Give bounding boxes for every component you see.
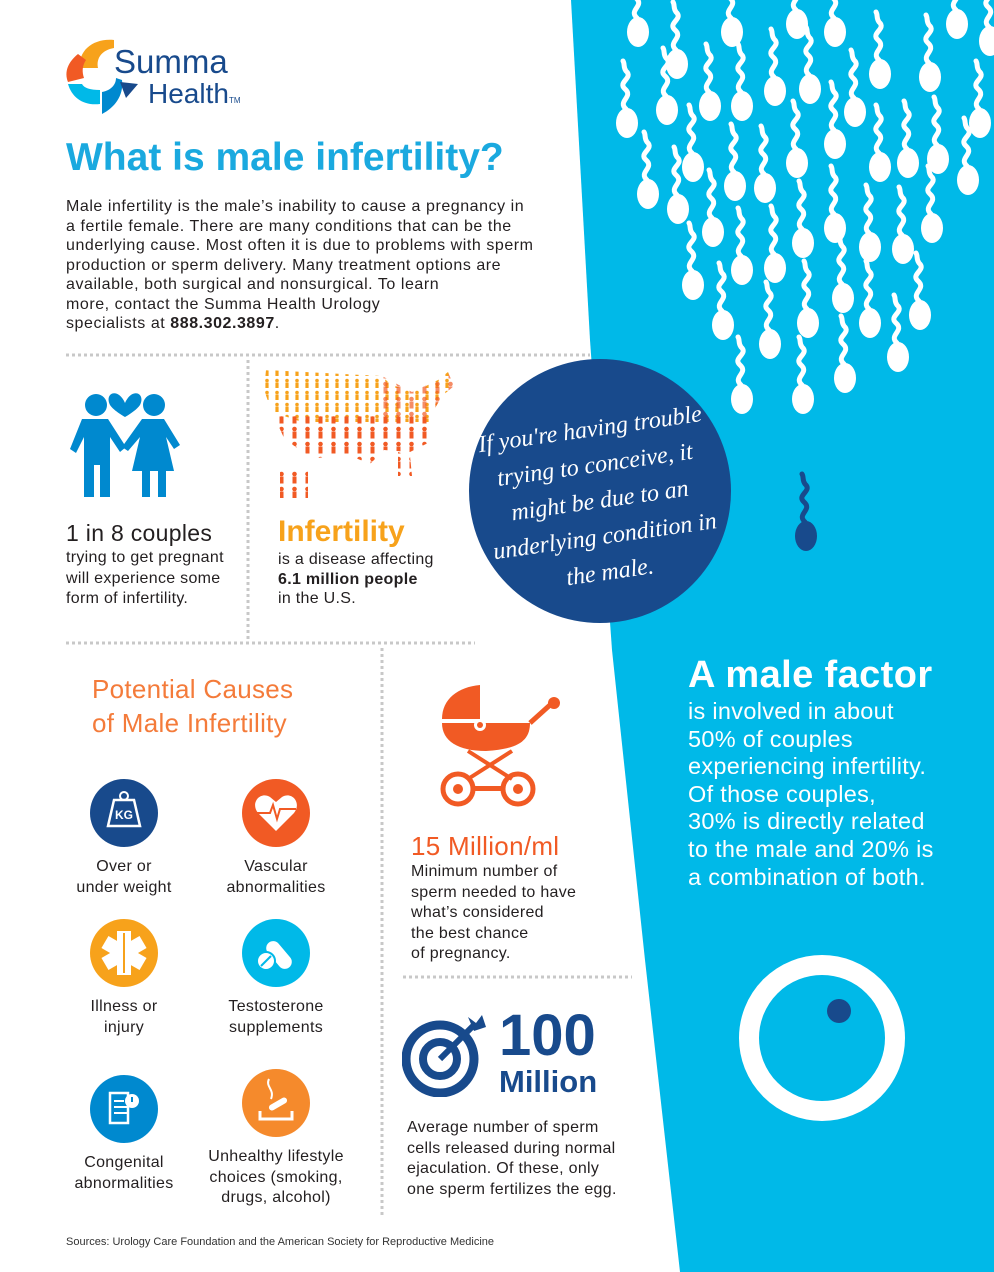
stat: infertility: 6.1 million people [278, 570, 418, 588]
icon: US map of people [265, 370, 453, 498]
stat: 100 million [499, 1003, 597, 1099]
male factor text [688, 654, 934, 890]
sources: Sources: Urology Care Foundation and the American Society for Reproductive Medicine [66, 1236, 494, 1248]
male factor text: experiencing infertility. [688, 753, 926, 779]
cause: vascular [226, 779, 326, 896]
stat: 15 million/ml: the best chance [411, 924, 528, 942]
cause: vascular: abnormalities [226, 878, 326, 896]
cause: illness: Illness or [90, 998, 158, 1015]
cause: lifestyle: Unhealthy lifestyle [208, 1148, 344, 1165]
intro paragraph: a fertile female. There are many conditions that can be the [66, 218, 512, 234]
stat: 15 million/ml: Minimum number of [411, 863, 557, 880]
intro paragraph: available, both surgical and nonsurgical. To learn [66, 276, 439, 293]
cause: testosterone [228, 919, 324, 1036]
male factor text: to the male and 20% is [688, 836, 934, 862]
intro paragraph: more, contact the Summa Health Urology [66, 296, 380, 312]
cause: weight: under weight [76, 878, 172, 896]
intro paragraph: production or sperm delivery. Many treatment options are [66, 256, 501, 274]
logo: HealthTM [148, 78, 240, 109]
logo [66, 40, 240, 114]
stat: 15 million/ml: sperm needed to have [411, 884, 576, 900]
text: 100 million description [407, 1119, 617, 1198]
intro paragraph: underlying cause. Most often it is due to problems with sperm [66, 237, 534, 254]
stat: infertility: is a disease affecting [278, 551, 434, 568]
male factor text: is involved in about [688, 698, 894, 724]
cause: illness [90, 919, 158, 1036]
intro paragraph: Male infertility is the male’s inability to cause a pregnancy in [66, 198, 524, 215]
text: 100 million description: Average number of sperm [407, 1119, 599, 1136]
intro paragraph [66, 198, 534, 332]
callout circle [469, 359, 731, 623]
text: 100 million description: ejaculation. Of these, only [407, 1160, 599, 1177]
cause: congenital: abnormalities [74, 1174, 174, 1192]
stat: 15 million/ml [411, 831, 576, 962]
icon: couple [70, 393, 180, 497]
heading: potential causes: of Male Infertility [92, 708, 287, 738]
stat: infertility [278, 515, 434, 607]
text: 100 million description: cells released during normal [407, 1140, 616, 1156]
stat: 15 million/ml: 15 Million/ml [411, 831, 559, 861]
cause: weight [76, 779, 172, 896]
icon: stroller [440, 685, 560, 806]
cause: congenital: Congenital [84, 1154, 164, 1171]
heading: potential causes: Potential Causes [92, 674, 293, 704]
male factor text: 30% is directly related [688, 808, 925, 834]
cause: lifestyle [208, 1069, 344, 1206]
cause: congenital [74, 1075, 174, 1192]
stat: 1 in 8 couples: will experience some [66, 570, 221, 586]
stat: 15 million/ml: what’s considered [411, 904, 544, 921]
stat: 15 million/ml: of pregnancy. [411, 945, 511, 962]
stat: 1 in 8 couples: form of infertility. [66, 590, 188, 607]
heading: potential causes [92, 674, 293, 738]
cause: testosterone: Testosterone [228, 998, 324, 1015]
cause: weight: KG [115, 808, 133, 822]
stat: infertility: in the U.S. [278, 590, 356, 607]
male factor text: A male factor [688, 654, 933, 696]
callout circle: If you're having trouble trying to conceive, it might be due to an underlying condition in the male. [477, 401, 718, 591]
cause: weight: Over or [96, 858, 152, 875]
cause: testosterone: supplements [229, 1018, 323, 1036]
stat: 1 in 8 couples: trying to get pregnant [66, 549, 224, 566]
stat: 1 in 8 couples [66, 520, 224, 607]
cause: vascular: Vascular [244, 858, 308, 875]
icon: target [402, 1015, 486, 1097]
cause: lifestyle: drugs, alcohol) [221, 1189, 331, 1206]
stat: infertility: Infertility [278, 515, 405, 548]
stat: 100 million: 100 [499, 1003, 596, 1068]
stat: 1 in 8 couples: 1 in 8 couples [66, 520, 212, 546]
male factor text: a combination of both. [688, 864, 926, 890]
title: What is male infertility? [66, 136, 504, 179]
cause: illness: injury [104, 1018, 144, 1036]
stat: 100 million: Million [499, 1064, 597, 1099]
intro paragraph: specialists at 888.302.3897. [66, 315, 280, 332]
text: 100 million description: one sperm fertilizes the egg. [407, 1180, 617, 1198]
male factor text: 50% of couples [688, 726, 853, 752]
logo: Summa [114, 43, 228, 80]
male factor text: Of those couples, [688, 781, 876, 807]
cause: lifestyle: choices (smoking, [209, 1168, 343, 1186]
